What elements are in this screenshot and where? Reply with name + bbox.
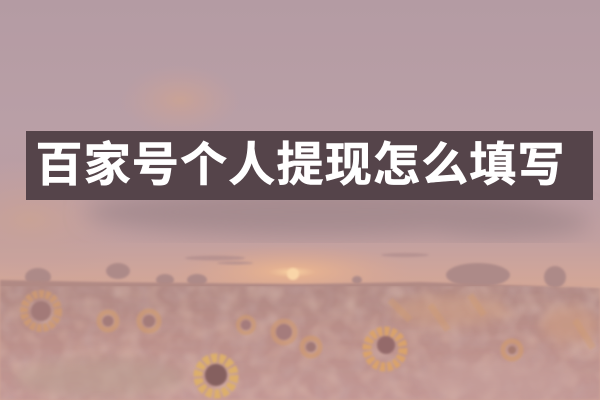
- dark cloud band: [85, 188, 590, 238]
- warm cloud glow: [120, 65, 240, 135]
- far trees: [25, 263, 566, 288]
- sunflower heads: [24, 294, 593, 394]
- sunflower field: [0, 263, 600, 400]
- sun glow: [172, 244, 412, 300]
- pink haze at left: [0, 160, 140, 280]
- thin clouds: [185, 253, 429, 264]
- sun: [287, 268, 299, 280]
- title bar: [26, 131, 593, 200]
- field texture: [0, 286, 600, 400]
- title: 百家号个人提现怎么填写: [36, 138, 566, 191]
